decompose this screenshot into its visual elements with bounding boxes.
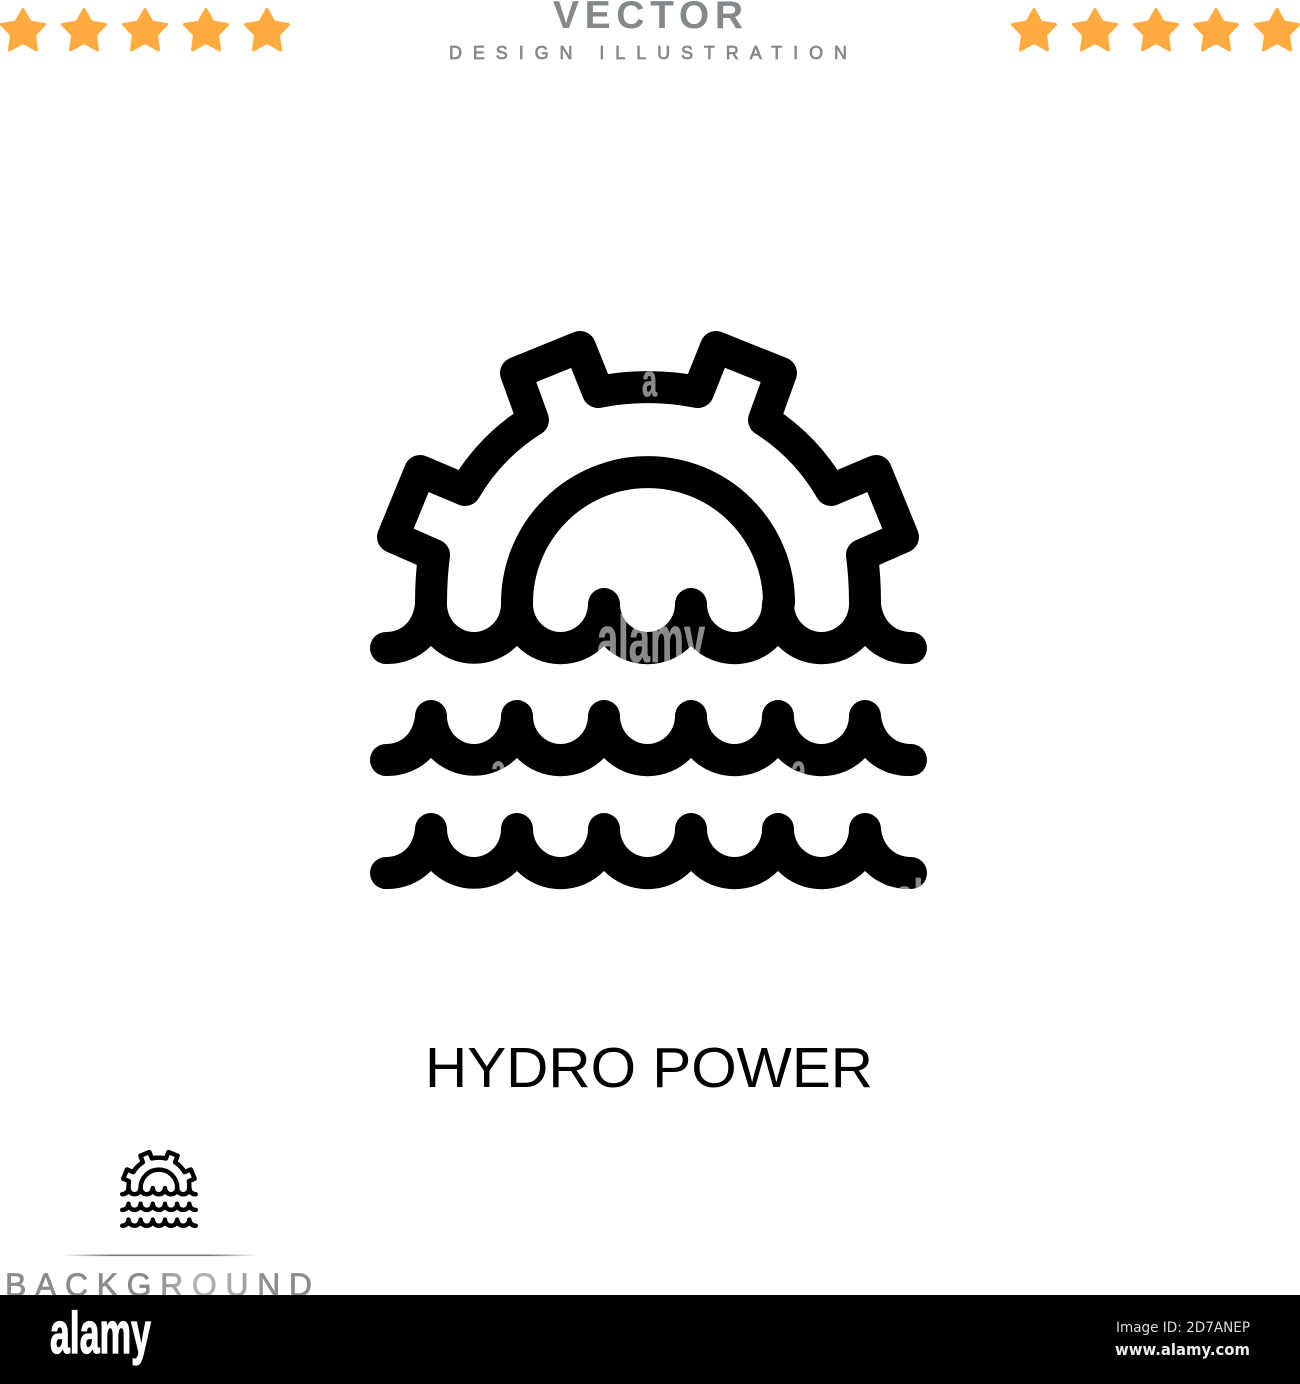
- logo: alamy: alamy: [50, 1301, 151, 1366]
- inner arch: [517, 472, 779, 603]
- wave row 1: [370, 588, 927, 664]
- watermark: alamy on icon: alamy: [597, 602, 705, 676]
- gear outline: [393, 347, 903, 603]
- footer bar: [0, 1295, 1300, 1384]
- watermark: alamy on icon: a: [491, 745, 507, 796]
- image id: Image ID: 2D7ANEP: [1116, 1320, 1250, 1336]
- subheading: DESIGN ILLUSTRATION: DESIGN ILLUSTRATION: [449, 43, 847, 63]
- wave row 3: [370, 813, 927, 889]
- watermark: alamy on icon: a: [642, 355, 658, 406]
- title: HYDRO POWER: HYDRO POWER: [425, 1036, 873, 1100]
- watermark: alamy on icon: [491, 355, 923, 921]
- watermark: alamy on icon: al: [895, 870, 923, 921]
- watermark: alamy on icon: a: [791, 745, 807, 796]
- icon: hydro power gear and waves: [370, 347, 927, 889]
- website: www.alamy.com: [1115, 1340, 1250, 1359]
- wave row 2: [370, 700, 927, 776]
- stars: top left rating: [2, 10, 288, 50]
- icon: small hydro power thumbnail: [120, 1152, 198, 1228]
- stars: top right rating: [1012, 10, 1298, 50]
- label: BACKGROUND: BACKGROUND: [5, 1267, 312, 1303]
